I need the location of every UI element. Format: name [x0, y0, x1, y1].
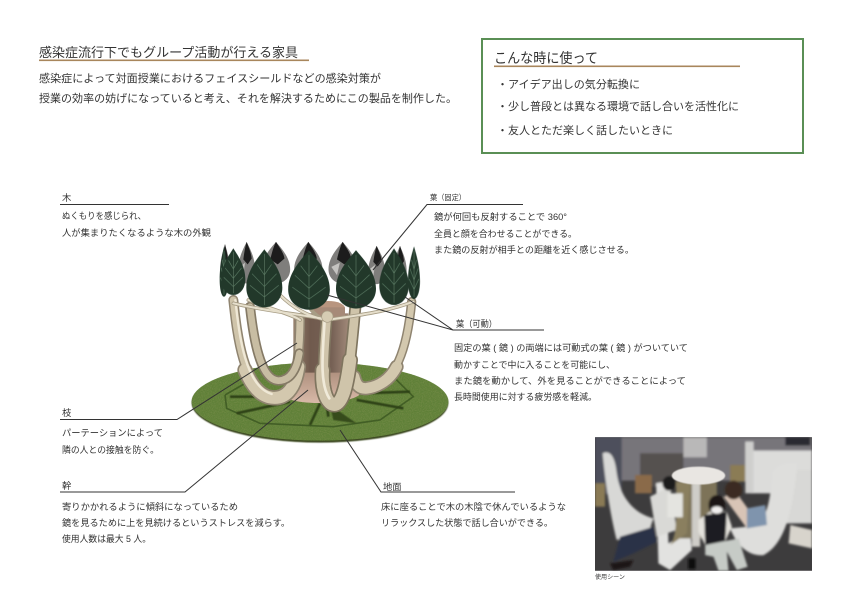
usage list: ・アイデア出しの気分転換に [497, 77, 640, 91]
callout: 幹: 幹 [62, 480, 72, 491]
callout: 葉（固定）: 全員と顔を合わせることができる。 [434, 228, 577, 239]
panel: usage scenes [482, 39, 803, 153]
trunk [290, 301, 359, 403]
photo: usage scene [595, 437, 812, 571]
front leaves [220, 246, 420, 310]
callout: 葉（固定） [373, 192, 634, 270]
callout: 木: 木 [62, 192, 71, 203]
people [650, 487, 677, 537]
callout: 幹 [60, 390, 308, 544]
callout: 地面: 床に座ることで木の木陰で休んでいるような [381, 501, 566, 512]
callout: 幹: 使用人数は最大 5 人。 [62, 533, 151, 544]
branches [233, 295, 413, 405]
callout: 地面 [340, 430, 566, 528]
callout: 葉（固定）: 葉（固定） [430, 192, 466, 202]
callout: 葉（可動）: 動かすことで中に入ることを可能にし、 [454, 359, 615, 370]
intro text [39, 71, 457, 105]
title: 感染症流行下でもグループ活動が行える家具 [39, 45, 298, 60]
callout: 葉（可動）: 固定の葉 ( 鏡 ) の両端には可動式の葉 ( 鏡 ) がついていて [454, 342, 688, 353]
mirrors and trunk [676, 482, 717, 538]
callout: 葉（可動）: 長時間使用に対する疲労感を軽減。 [454, 391, 597, 402]
callout: 木: ぬくもりを感じられ、 [62, 210, 146, 221]
callout: 地面: リラックスした状態で話し合いができる。 [381, 517, 553, 528]
callout: 葉（可動） [327, 295, 688, 402]
callout: 枝: パーテーションによって [62, 428, 163, 438]
photo caption: 使用シーン [595, 573, 625, 581]
callout: 葉（可動）: 葉（可動） [456, 318, 497, 329]
callout: 木: 人が集まりたくなるような木の外観 [62, 227, 211, 238]
callout: 葉（固定）: また鏡の反射が相手との距離を近く感じさせる。 [434, 244, 634, 255]
main person [698, 512, 732, 545]
callout: 幹: 鏡を見るために上を見続けるというストレスを減らす。 [62, 517, 290, 528]
callout: 幹: 寄りかかれるように傾斜になっているため [62, 501, 238, 512]
usage list: ・少し普段とは異なる環境で話し合いを活性化に [497, 99, 739, 113]
callout: 地面: 地面 [383, 481, 402, 492]
white seat panels [603, 452, 653, 540]
usage list: ・友人とただ楽しく話したいときに [497, 123, 673, 137]
callout: 葉（固定）: 鏡が何回も反射することで 360° [434, 211, 567, 222]
intro text: 感染症によって対面授業におけるフェイスシールドなどの感染対策が [39, 71, 381, 85]
mirror leaves back row [220, 242, 407, 286]
panel heading: こんな時に使って [494, 50, 598, 66]
ground [192, 363, 448, 443]
callout: 枝: 枝 [62, 407, 72, 418]
callout: 葉（可動）: また鏡を動かして、外を見ることができることによって [454, 375, 686, 386]
illustration: tree furniture [192, 242, 448, 443]
usage list [497, 77, 739, 137]
back cabinets [750, 451, 812, 493]
callout: 枝: 隣の人との接触を防ぐ。 [62, 444, 159, 455]
callout: 木 [60, 192, 211, 238]
callout: 枝 [60, 343, 297, 455]
intro text: 授業の効率の妨げになっていると考え、それを解決するためにこの製品を制作した。 [39, 91, 457, 105]
